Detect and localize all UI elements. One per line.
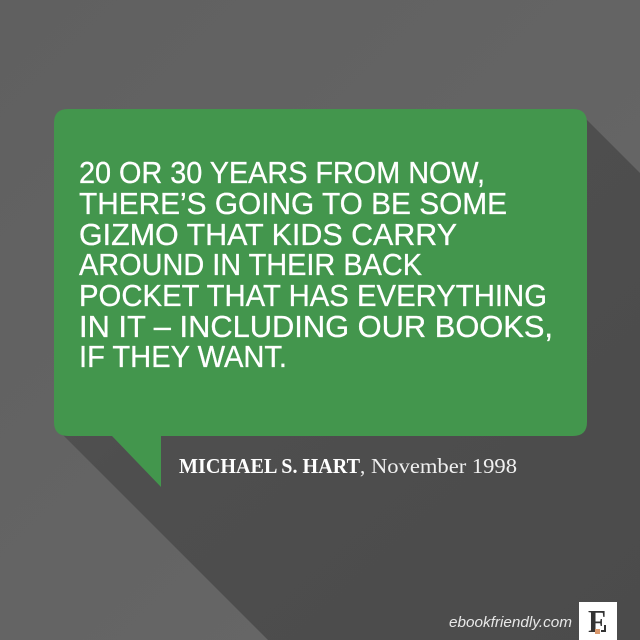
quote text: AROUND IN THEIR BACK [79, 248, 422, 282]
logo: F [588, 603, 606, 639]
long shadow [60, 118, 640, 640]
attribution: November 1998 [371, 454, 517, 478]
quote text: IN IT – INCLUDING OUR BOOKS, [79, 310, 553, 344]
attribution: , [360, 454, 365, 478]
quote text: POCKET THAT HAS EVERYTHING [79, 279, 547, 313]
attribution [179, 454, 517, 478]
quote text: IF THEY WANT. [79, 340, 287, 374]
website label: ebookfriendly.com [449, 615, 572, 631]
quote text: GIZMO THAT KIDS CARRY [79, 218, 457, 252]
quote text: 20 OR 30 YEARS FROM NOW, [79, 156, 485, 190]
attribution: MICHAEL S. HART [179, 454, 360, 478]
speech bubble [54, 109, 587, 487]
quote text: THERE’S GOING TO BE SOME [79, 187, 507, 221]
logo [579, 602, 617, 640]
quote text [79, 156, 553, 374]
